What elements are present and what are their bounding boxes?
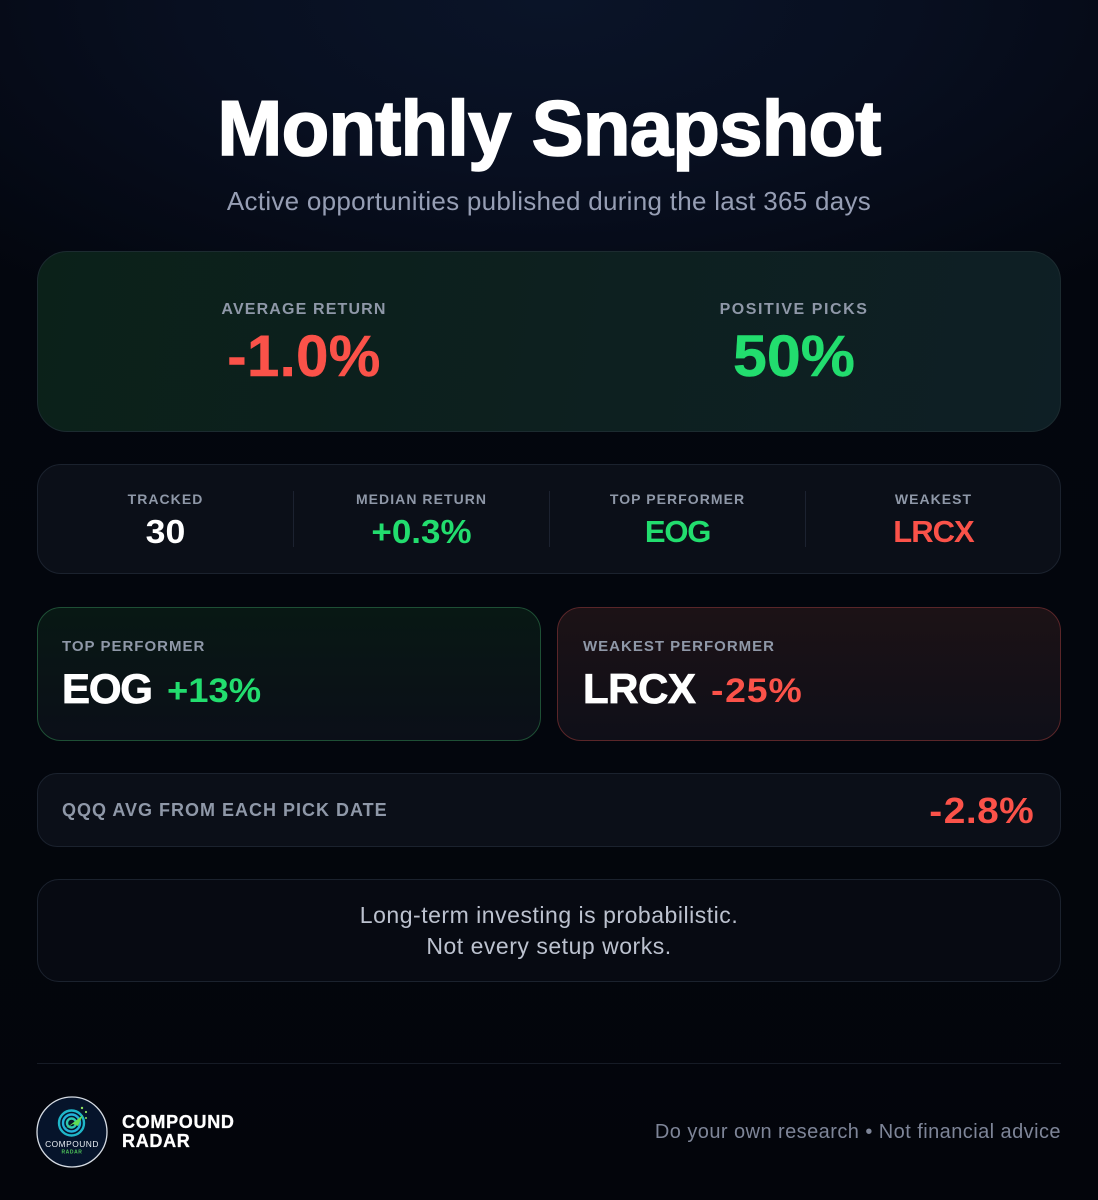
panel: weakest performer [557,607,1061,741]
stat: tracked: TRACKED [128,491,203,507]
stat: top performer: TOP PERFORMER [610,491,745,507]
disclaimer: Do your own research • Not financial advice [655,1121,1061,1143]
brand name: RADAR [122,1131,190,1151]
icon: compound radar logo [36,1096,108,1168]
stat: median return [356,491,487,550]
metric: positive picks: POSITIVE PICKS [720,301,868,318]
label: TOP PERFORMER [62,638,205,655]
note text: Not every setup works. [426,933,672,959]
panel: stats row [37,464,1061,574]
stat: tracked [128,491,203,550]
subtitle: Active opportunities published during the last 365 days [227,186,871,216]
change: +13% [167,672,261,710]
stat: median return: MEDIAN RETURN [356,491,487,507]
note text [360,902,738,959]
stat: tracked: 30 [146,513,185,550]
panel: QQQ benchmark [37,773,1061,847]
metric: average return: AVERAGE RETURN [221,301,387,318]
icon: compound radar logo: COMPOUND [45,1139,99,1149]
ticker: EOG [62,665,152,712]
stat: top performer: EOG [645,514,710,549]
metric: average return: -1.0% [227,324,381,389]
brand name: COMPOUND [122,1112,235,1132]
stat: weakest [893,491,974,549]
stat: top performer [610,491,745,549]
panel: headline metrics [37,251,1061,432]
panel: note [37,879,1061,982]
label: QQQ AVG FROM EACH PICK DATE [62,800,388,820]
stat: weakest: LRCX [893,514,974,549]
metric: positive picks: 50% [733,324,855,389]
value: -2.8% [929,790,1034,831]
icon: compound radar logo: RADAR [61,1150,83,1156]
change: -25% [711,672,803,710]
ticker: LRCX [583,665,695,712]
title: Monthly Snapshot [217,84,881,172]
note text: Long-term investing is probabilistic. [360,902,738,928]
panel: top performer [37,607,541,741]
label: WEAKEST PERFORMER [583,638,775,655]
metric: average return [221,301,387,389]
metric: positive picks [720,301,868,389]
stat: median return: +0.3% [371,513,472,550]
brand name [122,1112,235,1151]
stat: weakest: WEAKEST [895,491,972,507]
